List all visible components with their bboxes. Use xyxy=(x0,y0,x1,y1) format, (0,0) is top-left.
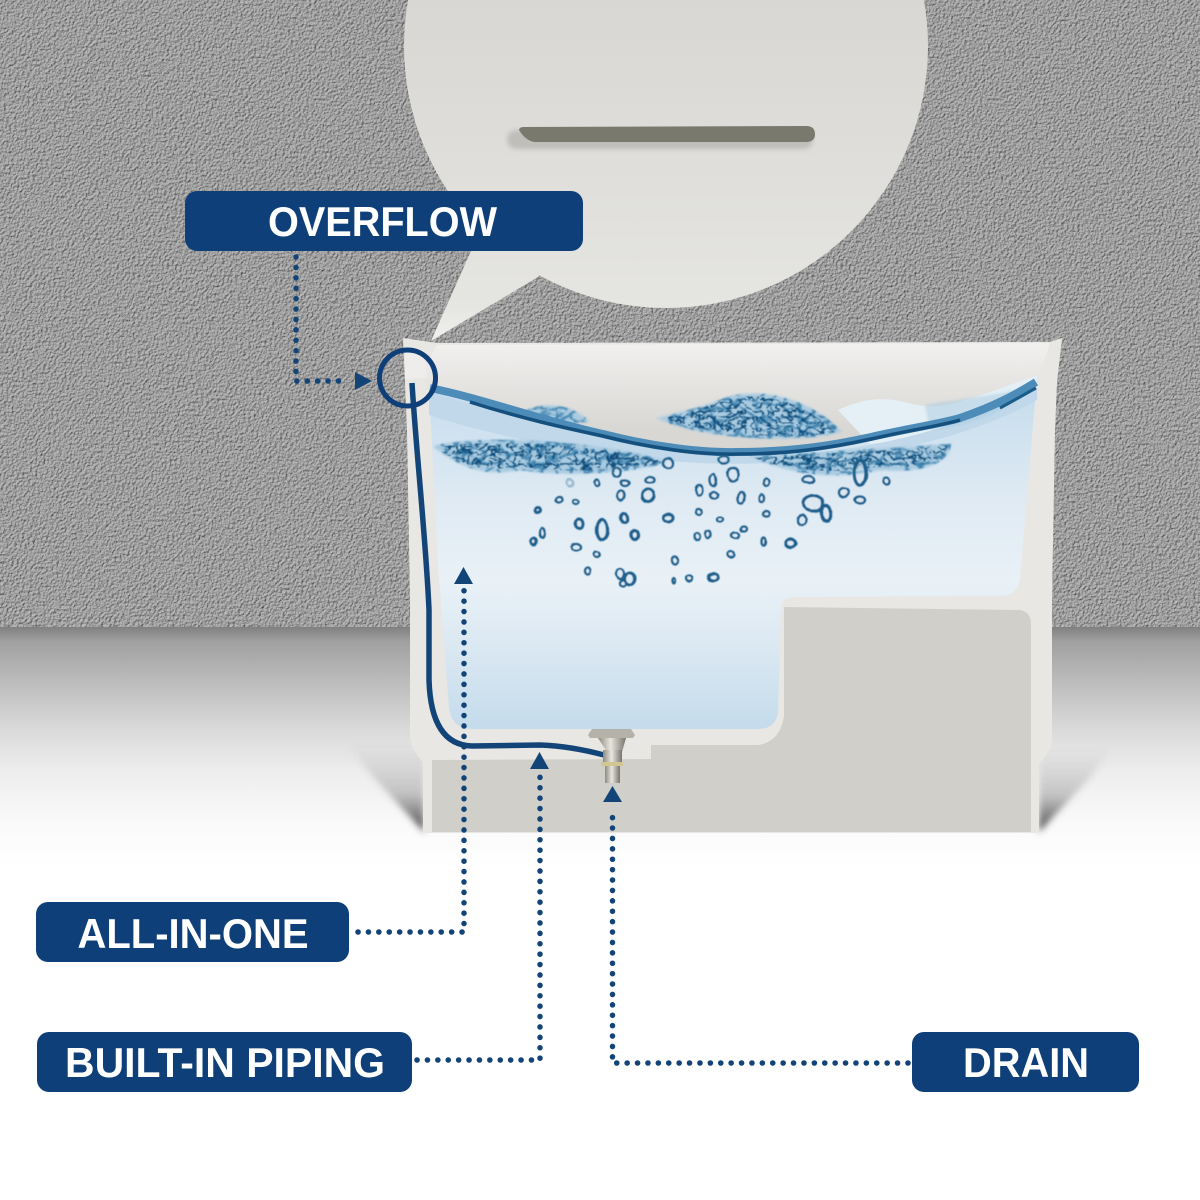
background wall xyxy=(0,0,1200,627)
speech tail xyxy=(431,200,600,341)
air bubbles xyxy=(531,456,890,586)
label: drain: DRAIN xyxy=(963,1039,1089,1086)
label: built-in piping: BUILT-IN PIPING xyxy=(65,1039,385,1086)
water body xyxy=(429,378,1037,729)
surface line xyxy=(430,382,1036,452)
label: built-in piping xyxy=(37,1032,412,1092)
foam mid-tone layer xyxy=(433,393,951,475)
arrow: built-in piping xyxy=(417,752,549,1060)
overflow fitting xyxy=(405,350,427,379)
foam dark speckles xyxy=(436,397,948,471)
label: all-in-one xyxy=(36,902,349,962)
drain fitting xyxy=(588,729,635,783)
base and step block xyxy=(432,607,1031,832)
foam base tint xyxy=(433,384,1036,475)
water surface and bubbles xyxy=(429,376,1037,586)
arrow: drain xyxy=(603,786,908,1063)
tub cross-section xyxy=(350,338,1108,833)
arrow: all-in-one xyxy=(358,567,473,932)
built-in piping xyxy=(412,383,604,755)
label: all-in-one: ALL-IN-ONE xyxy=(78,910,308,957)
tub body xyxy=(403,338,1062,833)
back wall above water xyxy=(419,343,1050,460)
label: overflow xyxy=(185,191,583,251)
floor shadow right xyxy=(1039,750,1108,832)
arrow: overflow xyxy=(296,257,372,390)
floor shadow left xyxy=(350,745,424,832)
magnified overflow callout xyxy=(404,0,928,341)
label: overflow: OVERFLOW xyxy=(268,198,497,245)
overflow ring marker xyxy=(380,350,436,406)
overflow slot xyxy=(507,126,815,149)
speech circle xyxy=(404,0,928,308)
pale wave band under the line xyxy=(429,388,1037,464)
floor xyxy=(0,627,1200,867)
pale crest on right xyxy=(838,376,1037,444)
label: drain xyxy=(912,1032,1139,1092)
